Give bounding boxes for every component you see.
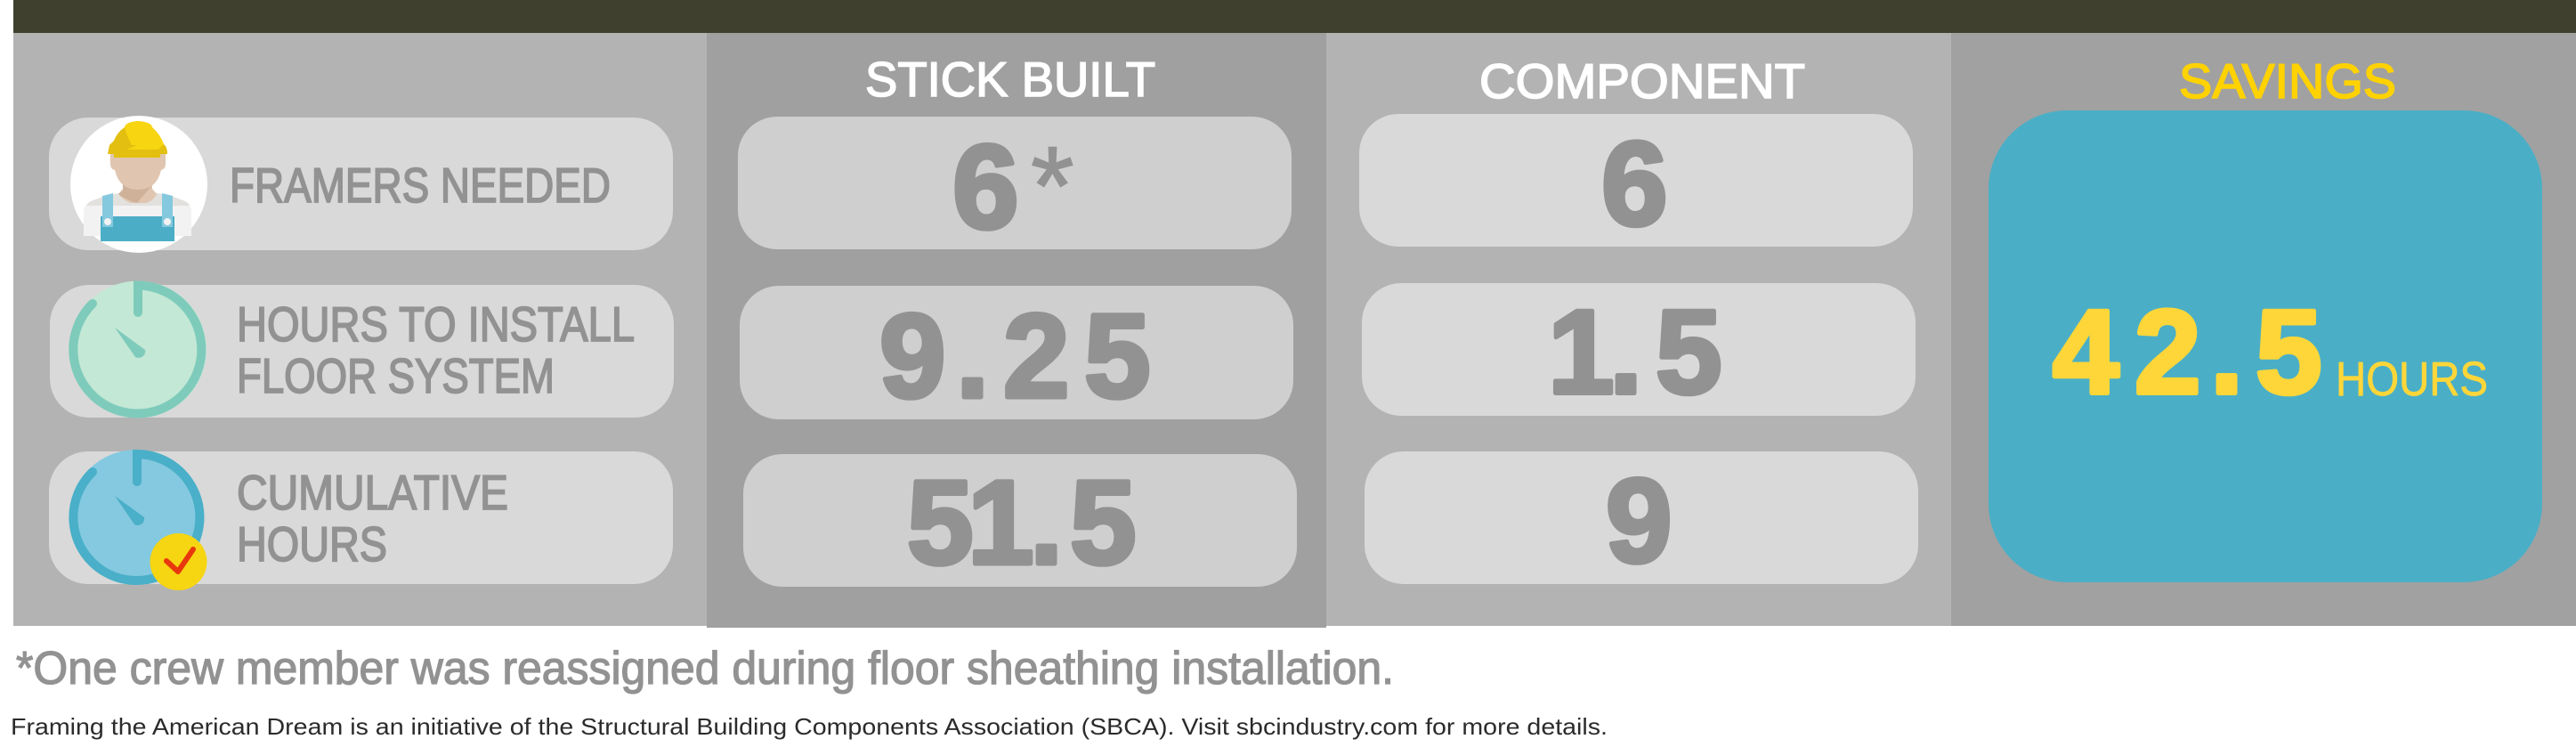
- value pill: 6*: [738, 117, 1292, 254]
- label pill: hours to install: [50, 281, 674, 418]
- heading: savings: SAVINGS: [2179, 53, 2396, 109]
- savings card: HOURS: [2336, 353, 2488, 406]
- value pill: 1.5: 1.5: [1548, 287, 1722, 418]
- footnote: *One crew member was reassigned during floor sheathing installation.: [16, 643, 1394, 694]
- label pill: framers needed: [49, 116, 673, 253]
- value pill: 9.25: 9.25: [879, 290, 1151, 423]
- panel: row labels: [13, 33, 709, 626]
- label pill: hours to install: FLOOR SYSTEM: [237, 348, 555, 403]
- value pill: 6*: *: [1031, 125, 1074, 248]
- savings card: [1989, 110, 2542, 582]
- value pill: 6: 6: [1601, 118, 1668, 251]
- value pill: 51.5: 51.5: [907, 457, 1137, 589]
- savings card: 42.5: [2053, 287, 2322, 418]
- label pill: cumulative hours: HOURS: [237, 516, 387, 572]
- heading: stick built: STICK BUILT: [865, 52, 1155, 107]
- value pill: 9.25: [740, 286, 1293, 423]
- label text: FRAMERS NEEDED: [230, 158, 611, 213]
- label pill: cumulative hours: [49, 450, 673, 590]
- panel: savings: [1951, 33, 2576, 626]
- credit line: Framing the American Dream is an initiative of the Structural Building Components Association (SBCA). Visit sbcindustry.com for more details.: [11, 713, 1608, 740]
- icon: blue timer with check: [69, 450, 207, 590]
- panel: component: [1326, 33, 1951, 626]
- icon: green timer: [69, 281, 207, 418]
- panel: stick built: [707, 33, 1326, 628]
- icon: construction worker: [70, 116, 207, 253]
- label text: HOURS TO INSTALL: [237, 296, 635, 352]
- label text: CUMULATIVE: [237, 465, 508, 520]
- top bar: [13, 0, 2576, 33]
- value pill: 9: 9: [1606, 455, 1673, 588]
- value pill: 6*: 6: [952, 121, 1019, 254]
- value pill: 6: [1359, 114, 1913, 251]
- heading: component: COMPONENT: [1479, 53, 1805, 109]
- value pill: 51.5: [743, 454, 1297, 589]
- value pill: 1.5: [1362, 283, 1916, 418]
- value pill: 9: [1365, 451, 1918, 588]
